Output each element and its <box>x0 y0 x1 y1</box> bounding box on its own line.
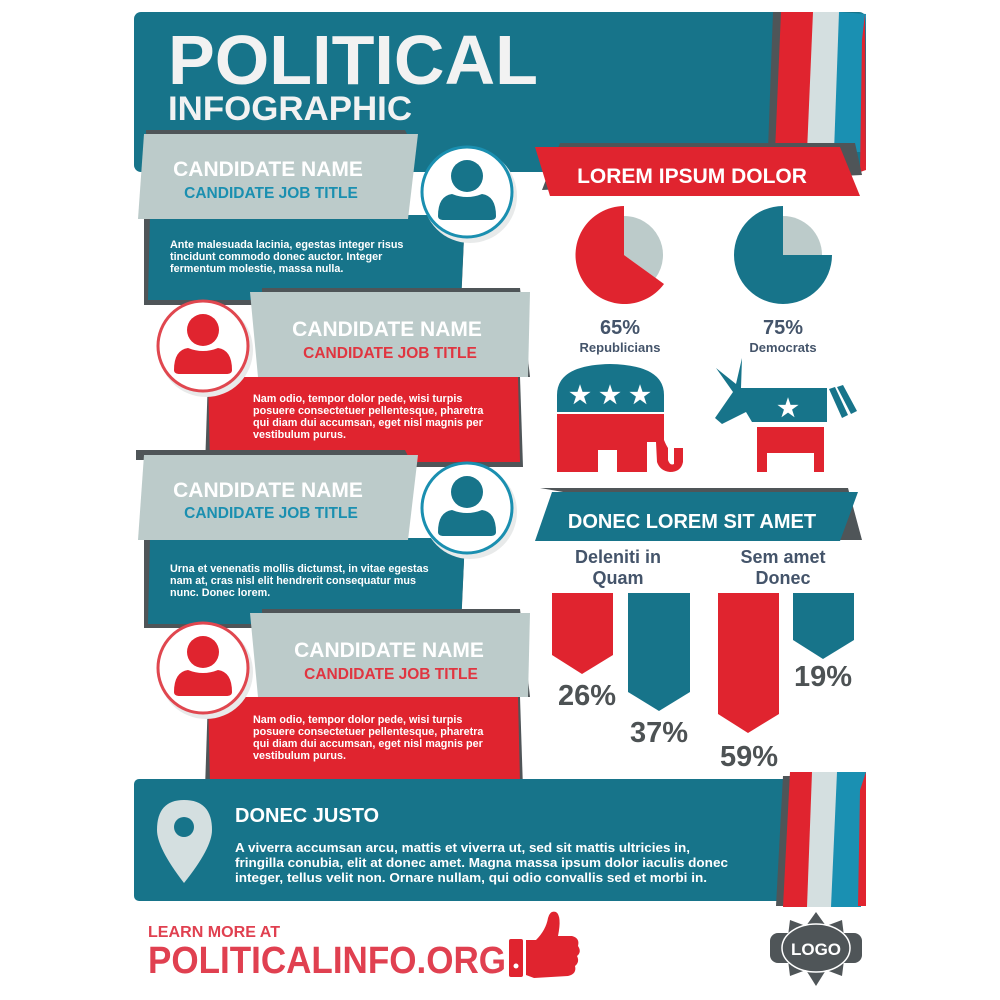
panel: candidate 1: fermentum molestie, massa nulla. <box>170 263 343 275</box>
panel: candidate 1: Ante malesuada lacinia, egestas integer risus <box>170 239 403 251</box>
panel: candidate 4: qui diam dui accumsan, eget nisl magnis per <box>253 738 484 750</box>
panel: candidate 4: CANDIDATE NAME <box>294 639 484 662</box>
call to action text <box>148 924 506 982</box>
panel: donec justo footer: integer, tellus velit non. Ornare nullam, qui odio convallis sed et morbi in. <box>235 871 707 885</box>
panel: candidate 3 <box>136 450 517 628</box>
bar chart: deleniti in quam <box>552 547 690 749</box>
panel: candidate 1: CANDIDATE NAME <box>173 158 363 181</box>
icon: avatar red <box>158 301 253 397</box>
panel: candidate 1: tincidunt commodo donec auctor. Integer <box>170 251 383 263</box>
icon: avatar red 2 <box>158 623 253 719</box>
panel: candidate 2 <box>158 288 530 467</box>
panel: donec justo footer: A viverra accumsan arcu, mattis et viverra ut, sed sit mattis ultricies in, <box>235 841 690 855</box>
panel: candidate 2: Nam odio, tempor dolor pede, wisi turpis <box>253 393 462 405</box>
chart: republicans pie <box>576 206 664 355</box>
icon: elephant: ★ <box>629 382 651 409</box>
chart: democrats pie: 75% <box>763 317 803 339</box>
title: INFOGRAPHIC <box>168 90 412 128</box>
logo: LOGO <box>791 940 841 959</box>
bar chart: deleniti in quam: 37% <box>630 717 688 749</box>
panel: candidate 3: CANDIDATE NAME <box>173 479 363 502</box>
panel: donec justo footer: fringilla conubia, elit at donec amet. Magna massa ipsum dolor iaculis donec <box>235 856 728 870</box>
panel: candidate 2: CANDIDATE NAME <box>292 318 482 341</box>
icon: elephant: ★ <box>599 382 621 409</box>
panel: candidate 4: vestibulum purus. <box>253 750 346 762</box>
chart: democrats pie: Democrats <box>749 340 817 355</box>
bar chart: sem amet donec: 59% <box>720 741 778 773</box>
panel: donec justo footer <box>134 772 866 907</box>
panel: candidate 2: CANDIDATE JOB TITLE <box>303 345 477 362</box>
panel: candidate 2: posuere consectetuer pellentesque, pharetra <box>253 405 484 417</box>
panel: candidate 3: CANDIDATE JOB TITLE <box>184 505 358 522</box>
bar chart: deleniti in quam: Deleniti in <box>575 547 661 567</box>
heading: lorem ipsum dolor ribbon <box>535 143 862 196</box>
panel: candidate 2: vestibulum purus. <box>253 429 346 441</box>
bar chart: sem amet donec: Sem amet <box>740 547 826 567</box>
panel: candidate 3: nam at, cras nisl elit hendrerit consequatur mus <box>170 575 416 587</box>
heading: donec lorem sit amet ribbon <box>535 488 862 541</box>
panel: candidate 3: Urna et venenatis mollis dictumst, in vitae egestas <box>170 563 429 575</box>
panel: candidate 4: CANDIDATE JOB TITLE <box>304 666 478 683</box>
call to action text: LEARN MORE AT <box>148 924 280 941</box>
panel: candidate 1 <box>138 130 517 305</box>
panel: candidate 4 <box>158 609 530 789</box>
panel: candidate 3: nunc. Donec lorem. <box>170 587 270 599</box>
bar chart: sem amet donec: 19% <box>794 661 852 693</box>
bar chart: sem amet donec: Donec <box>755 568 811 588</box>
call to action text: POLITICALINFO.ORG <box>148 940 506 982</box>
header panel <box>134 12 866 172</box>
icon: elephant <box>557 364 683 472</box>
chart: republicans pie: Republicians <box>580 340 660 355</box>
icon: donkey: ★ <box>777 395 799 422</box>
panel: candidate 1: CANDIDATE JOB TITLE <box>184 185 358 202</box>
logo <box>770 912 862 986</box>
chart: democrats pie <box>734 206 832 355</box>
icon: avatar teal <box>422 147 517 243</box>
chart: republicans pie: 65% <box>600 317 640 339</box>
panel: candidate 2: qui diam dui accumsan, eget nisl magnis per <box>253 417 484 429</box>
icon: location pin <box>157 800 212 883</box>
bar chart: deleniti in quam: 26% <box>558 680 616 712</box>
icon: elephant: ★ <box>569 382 591 409</box>
icon: avatar teal 2 <box>422 463 517 559</box>
icon: thumbs up <box>509 912 580 978</box>
title: POLITICAL <box>168 21 538 99</box>
heading: lorem ipsum dolor ribbon: LOREM IPSUM DOLOR <box>577 165 807 188</box>
panel: donec justo footer: DONEC JUSTO <box>235 805 379 827</box>
heading: donec lorem sit amet ribbon: DONEC LOREM SIT AMET <box>568 511 816 533</box>
icon: donkey <box>715 358 857 472</box>
panel: candidate 4: Nam odio, tempor dolor pede, wisi turpis <box>253 714 462 726</box>
panel: candidate 4: posuere consectetuer pellentesque, pharetra <box>253 726 484 738</box>
bar chart: sem amet donec <box>718 547 854 773</box>
bar chart: deleniti in quam: Quam <box>592 568 644 588</box>
